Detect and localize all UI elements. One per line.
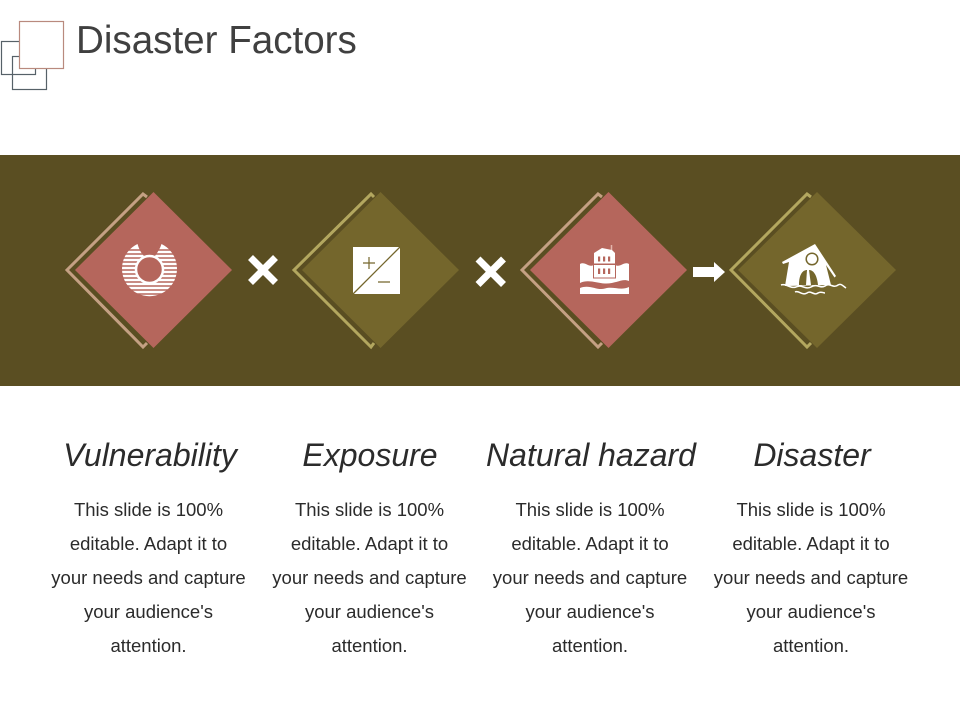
text: vulnerability: attention. <box>110 635 187 656</box>
text: exposure: your needs and capture <box>272 567 467 588</box>
text: vulnerability: This slide is 100% <box>74 499 223 520</box>
logo: overlapping squares <box>0 20 64 90</box>
text: exposure: This slide is 100% <box>295 499 444 520</box>
text: exposure <box>272 499 467 656</box>
heading: natural hazard: Natural hazard <box>486 437 696 473</box>
text: natural hazard: editable. Adapt it to <box>511 533 669 554</box>
heading: exposure: Exposure <box>302 437 438 473</box>
text: natural hazard: This slide is 100% <box>515 499 665 520</box>
title: Disaster Factors <box>76 18 357 62</box>
text: disaster <box>714 499 908 656</box>
operator: multiply 1 <box>250 258 276 282</box>
text: natural hazard: attention. <box>552 635 628 656</box>
arrow <box>693 262 725 282</box>
diamond: vulnerability <box>67 192 232 348</box>
text: vulnerability: your audience's <box>84 601 213 622</box>
icon: building in flood <box>580 245 629 294</box>
icon: flooded house <box>781 244 846 294</box>
operator: multiply 2 <box>478 259 504 284</box>
icon: striped ring <box>120 244 179 296</box>
diamond: exposure <box>294 192 459 348</box>
text: natural hazard: your needs and capture <box>493 567 687 588</box>
diamond: disaster <box>731 192 896 348</box>
icon: plus minus square <box>353 247 400 294</box>
heading: disaster: Disaster <box>753 437 871 473</box>
diamond: natural hazard <box>522 192 687 348</box>
heading: vulnerability: Vulnerability <box>63 437 237 473</box>
text: exposure: attention. <box>331 635 408 656</box>
text: disaster: your needs and capture <box>714 567 908 588</box>
band with diagram <box>0 155 960 386</box>
text: vulnerability <box>51 499 246 656</box>
text: disaster: attention. <box>773 635 849 656</box>
text: disaster: editable. Adapt it to <box>732 533 890 554</box>
text: natural hazard <box>492 499 687 656</box>
text: disaster: This slide is 100% <box>736 499 886 520</box>
text: vulnerability: editable. Adapt it to <box>70 533 227 554</box>
text: natural hazard: your audience's <box>525 601 654 622</box>
text: exposure: your audience's <box>305 601 434 622</box>
text: exposure: editable. Adapt it to <box>291 533 448 554</box>
text: vulnerability: your needs and capture <box>51 567 246 588</box>
text: disaster: your audience's <box>746 601 876 622</box>
